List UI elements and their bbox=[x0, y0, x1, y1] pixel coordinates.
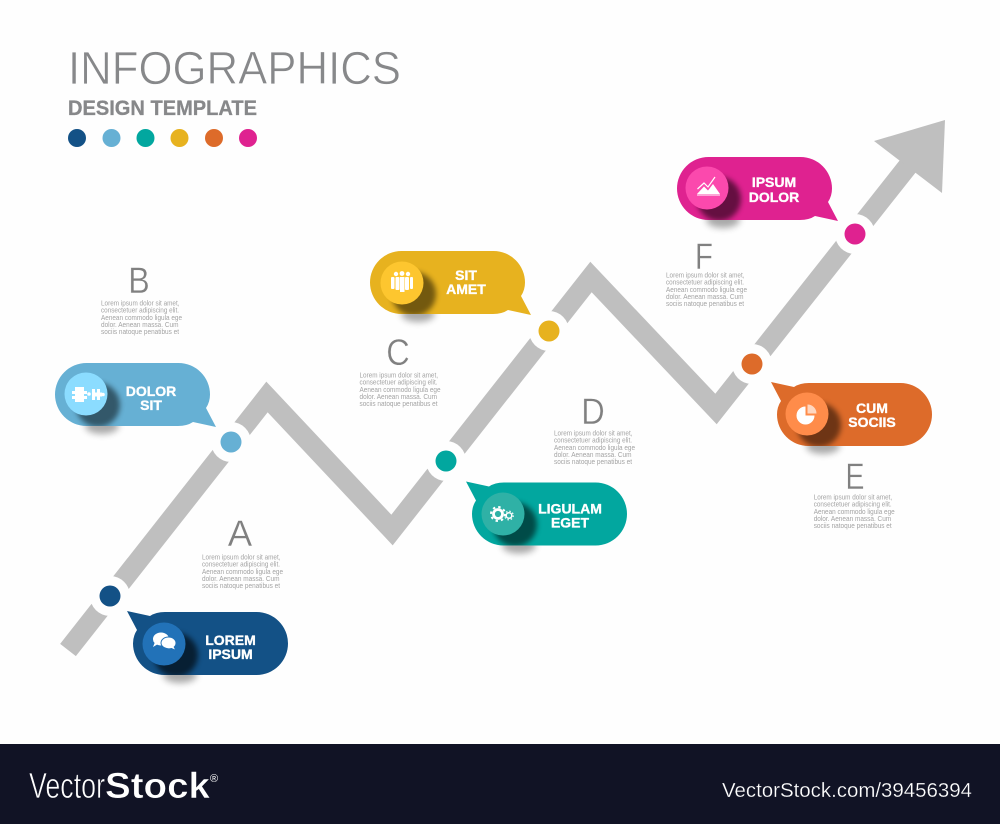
footer logo bbox=[29, 765, 218, 806]
label: EGET bbox=[551, 514, 590, 530]
timeline markers bbox=[90, 214, 875, 616]
text block C: dolor. Aenean massa. Cum bbox=[360, 392, 437, 401]
label: LOREM bbox=[205, 632, 256, 648]
text block F: dolor. Aenean massa. Cum bbox=[666, 292, 744, 301]
footer logo: Vector bbox=[29, 765, 105, 806]
icon: chat bubbles bbox=[153, 632, 176, 650]
label: DOLOR bbox=[749, 189, 799, 205]
title: INFOGRAPHICS bbox=[68, 42, 401, 94]
text block F: consectetuer adipiscing elit. bbox=[666, 278, 744, 287]
text block D: consectetuer adipiscing elit. bbox=[554, 436, 632, 445]
text block D bbox=[554, 391, 635, 466]
text block B: consectetuer adipiscing elit. bbox=[101, 306, 179, 315]
text block C: Aenean commodo ligula ege bbox=[360, 385, 440, 394]
text block E: sociis natoque penatibus et bbox=[814, 521, 892, 530]
text block C: Lorem ipsum dolor sit amet, bbox=[360, 370, 438, 380]
callout: lorem ipsum bbox=[127, 611, 288, 683]
callout: ipsum dolor bbox=[677, 157, 838, 228]
label: DOLOR bbox=[126, 383, 176, 399]
label: SOCIIS bbox=[848, 414, 896, 430]
icon: pie chart bbox=[796, 404, 816, 424]
label: LIGULAM bbox=[538, 500, 602, 516]
text block D: dolor. Aenean massa. Cum bbox=[554, 450, 632, 459]
icon: mountains bbox=[697, 177, 720, 196]
text block D: Aenean commodo ligula ege bbox=[554, 443, 635, 452]
text block B: dolor. Aenean massa. Cum bbox=[101, 320, 178, 329]
label: SIT bbox=[140, 397, 162, 413]
label: CUM bbox=[856, 400, 888, 416]
text block A: Lorem ipsum dolor sit amet, bbox=[202, 552, 280, 562]
text block E bbox=[814, 456, 895, 530]
label: IPSUM bbox=[752, 174, 796, 190]
subtitle: DESIGN TEMPLATE bbox=[68, 97, 257, 120]
text block C bbox=[360, 332, 440, 408]
text block A: dolor. Aenean massa. Cum bbox=[202, 574, 280, 583]
callout: ligulam eget bbox=[466, 482, 627, 554]
text block B: Lorem ipsum dolor sit amet, bbox=[101, 298, 180, 308]
label: SIT bbox=[455, 267, 477, 283]
callout: dolor sit bbox=[55, 363, 216, 434]
colour dots row bbox=[68, 129, 257, 147]
text block A: A bbox=[228, 513, 253, 554]
text block C: consectetuer adipiscing elit. bbox=[360, 378, 438, 387]
text block A bbox=[202, 513, 283, 590]
icon: puzzle bbox=[72, 387, 105, 402]
footer logo: Stock bbox=[105, 765, 211, 806]
text block A: sociis natoque penatibus et bbox=[202, 581, 280, 590]
text block D: sociis natoque penatibus et bbox=[554, 457, 632, 466]
text block A: consectetuer adipiscing elit. bbox=[202, 560, 280, 569]
text block F: Lorem ipsum dolor sit amet, bbox=[666, 270, 744, 280]
text block E: Aenean commodo ligula ege bbox=[814, 507, 895, 516]
footer bar bbox=[0, 744, 1000, 824]
text block C: sociis natoque penatibus et bbox=[360, 399, 438, 408]
text block D: Lorem ipsum dolor sit amet, bbox=[554, 428, 632, 438]
text block F: sociis natoque penatibus et bbox=[666, 299, 744, 308]
text block C: C bbox=[386, 332, 410, 373]
text block A: Aenean commodo ligula ege bbox=[202, 567, 283, 576]
text block B bbox=[101, 260, 182, 336]
text block F bbox=[666, 236, 747, 308]
icon: gears bbox=[491, 507, 513, 521]
zigzag arrow bbox=[68, 120, 945, 650]
icon: people bbox=[391, 271, 413, 292]
label: IPSUM bbox=[208, 646, 253, 662]
footer logo: ® bbox=[210, 773, 218, 785]
text block E: consectetuer adipiscing elit. bbox=[814, 500, 892, 509]
text block E: dolor. Aenean massa. Cum bbox=[814, 514, 891, 523]
text block B: sociis natoque penatibus et bbox=[101, 327, 179, 336]
text block E: E bbox=[846, 456, 864, 497]
text block F: Aenean commodo ligula ege bbox=[666, 285, 747, 294]
callout: sit amet bbox=[370, 251, 531, 322]
footer url: VectorStock.com/39456394 bbox=[722, 780, 972, 802]
text block E: Lorem ipsum dolor sit amet, bbox=[814, 492, 892, 502]
text block F: F bbox=[695, 236, 713, 277]
callout: cum sociis bbox=[771, 382, 932, 454]
text block B: B bbox=[128, 260, 150, 301]
label: AMET bbox=[446, 281, 486, 297]
text block D: D bbox=[581, 391, 605, 432]
text block B: Aenean commodo ligula ege bbox=[101, 313, 182, 322]
